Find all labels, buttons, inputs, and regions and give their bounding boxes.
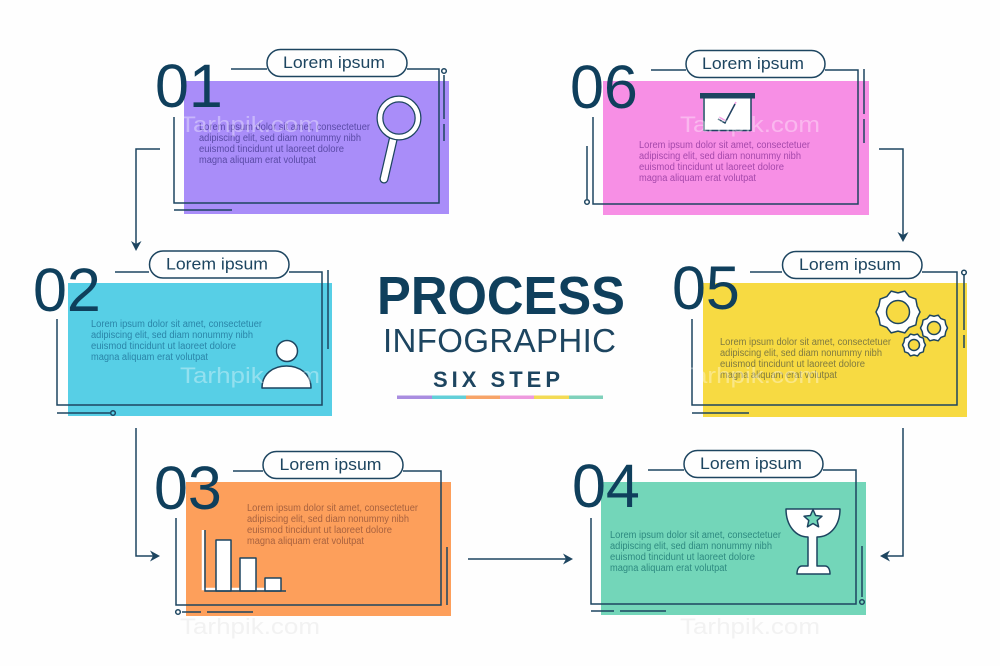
text block: step 05: euismod tincidunt ut laoreet dolore: [720, 359, 865, 370]
text block: step 06: adipiscing elit, sed diam nonummy nibh: [639, 151, 801, 162]
text block: step 01: [199, 122, 371, 166]
watermarks: Tarhpik.com: [680, 614, 820, 639]
text block: step 01: adipiscing elit, sed diam nonummy nibh: [199, 133, 361, 144]
arrow: step 05 to 04: [880, 428, 903, 562]
text block: step 02: Lorem ipsum dolor sit amet, consectetuer: [91, 319, 263, 330]
label pill: step 05: Lorem ipsum: [799, 255, 901, 274]
label pill: step 03: Lorem ipsum: [280, 455, 382, 474]
arrow: step 01 to 02: [131, 149, 160, 251]
text block: step 01: magna aliquam erat volutpat: [199, 155, 316, 166]
text block: step 01: euismod tincidunt ut laoreet dolore: [199, 144, 344, 155]
number 03: 03: [154, 454, 222, 522]
icon: bar chart: [203, 530, 286, 591]
watermarks: Tarhpik.com: [180, 614, 320, 639]
text block: step 06: [639, 140, 811, 184]
panel: step 05: [672, 252, 967, 417]
text block: step 03: magna aliquam erat volutpat: [247, 536, 364, 547]
label pill: step 06: [686, 50, 825, 78]
icon: gears: [876, 291, 948, 356]
panel: step 02: [33, 251, 332, 416]
arrow: step 06 to 05: [879, 149, 908, 242]
text block: step 05: adipiscing elit, sed diam nonummy nibh: [720, 348, 882, 359]
title: [377, 266, 625, 399]
text block: step 05: magna aliquam erat volutpat: [720, 370, 837, 381]
arrow: step 02 to 03: [136, 428, 160, 562]
icon: presentation board with check: [700, 93, 755, 131]
label pill: step 06: Lorem ipsum: [702, 54, 804, 73]
text block: step 06: Lorem ipsum dolor sit amet, consectetuer: [639, 140, 811, 151]
label pill: step 05: [782, 252, 922, 278]
text block: step 03: [247, 503, 419, 547]
watermarks: Tarhpik.com: [180, 112, 320, 137]
panel: step 04: [572, 450, 866, 615]
watermarks: Tarhpik.com: [680, 112, 820, 137]
text block: step 04: Lorem ipsum dolor sit amet, consectetuer: [610, 530, 782, 541]
text block: step 05: [720, 337, 892, 381]
text block: step 02: euismod tincidunt ut laoreet dolore: [91, 341, 236, 352]
number 06: 06: [570, 53, 638, 121]
label pill: step 02: Lorem ipsum: [166, 254, 268, 274]
text block: step 03: euismod tincidunt ut laoreet dolore: [247, 525, 392, 536]
panel: step 01: [155, 50, 449, 214]
text block: step 05: Lorem ipsum dolor sit amet, consectetuer: [720, 337, 892, 348]
number 04: 04: [572, 452, 640, 520]
number 02: 02: [33, 256, 101, 324]
icon: trophy with star: [786, 509, 840, 574]
watermarks: [180, 112, 820, 639]
icon: magnifying glass: [380, 99, 418, 179]
number 01: 01: [155, 52, 223, 120]
text block: step 03: adipiscing elit, sed diam nonummy nibh: [247, 514, 409, 525]
panel: step 06: [570, 50, 869, 215]
text block: step 02: adipiscing elit, sed diam nonummy nibh: [91, 330, 253, 341]
text block: step 03: Lorem ipsum dolor sit amet, consectetuer: [247, 503, 419, 514]
subheading: infographic: INFOGRAPHIC: [383, 322, 616, 359]
text block: step 02: [91, 319, 263, 363]
subheading: six step: SIX STEP: [433, 367, 560, 392]
text block: step 04: euismod tincidunt ut laoreet dolore: [610, 552, 755, 563]
text block: step 06: magna aliquam erat volutpat: [639, 173, 756, 184]
label pill: step 01: [267, 50, 407, 76]
text block: step 01: Lorem ipsum dolor sit amet, consectetuer: [199, 122, 371, 133]
label pill: step 04: [684, 450, 823, 478]
number 05: 05: [672, 254, 740, 322]
colour strip: [397, 396, 603, 399]
text block: step 04: adipiscing elit, sed diam nonummy nibh: [610, 541, 772, 552]
watermarks: Tarhpik.com: [680, 363, 820, 388]
label pill: step 02: [150, 251, 289, 278]
text block: step 06: euismod tincidunt ut laoreet dolore: [639, 162, 784, 173]
arrow: step 03 to 04: [468, 554, 573, 564]
text block: step 04: [610, 530, 782, 574]
icon: person: [262, 340, 311, 388]
label pill: step 01: Lorem ipsum: [283, 53, 385, 72]
label pill: step 03: [263, 452, 403, 478]
watermarks: Tarhpik.com: [180, 363, 320, 388]
text block: step 04: magna aliquam erat volutpat: [610, 563, 727, 574]
panel: step 03: [154, 452, 451, 616]
text block: step 02: magna aliquam erat volutpat: [91, 352, 208, 363]
label pill: step 04: Lorem ipsum: [700, 454, 802, 473]
heading: process: PROCESS: [377, 266, 625, 326]
